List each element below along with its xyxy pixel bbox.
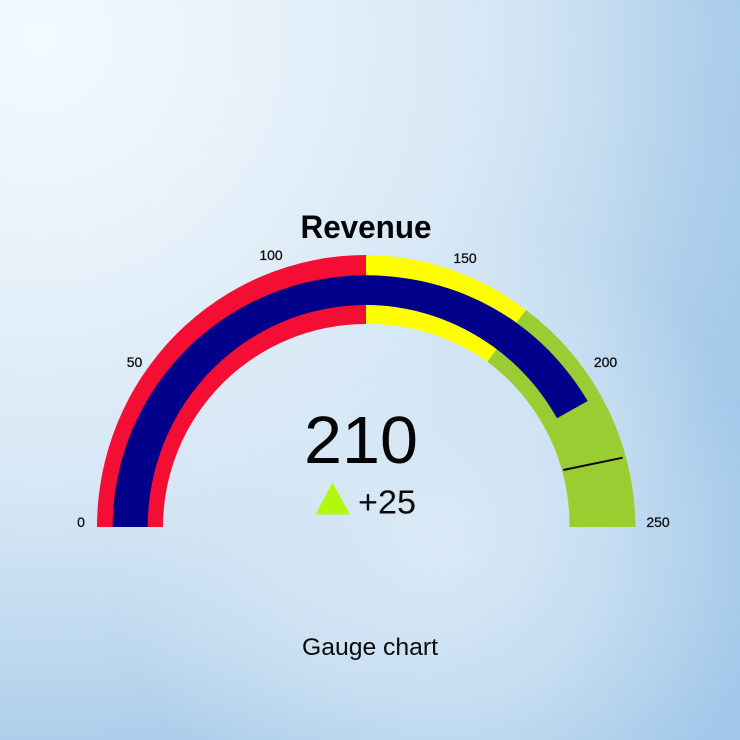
scale labels [77, 247, 670, 530]
gauge band: green range [487, 310, 636, 527]
main value: 210 [304, 403, 418, 478]
icon: up triangle [316, 482, 350, 514]
value bar [113, 275, 588, 527]
title: Revenue [300, 209, 432, 245]
label 50: 50 [127, 354, 142, 370]
gauge band: red range [97, 255, 366, 527]
gauge chart [97, 255, 636, 527]
label 0: 0 [77, 514, 85, 530]
gauge band: yellow range [366, 255, 526, 362]
label 250: 250 [646, 514, 670, 530]
target marker [563, 458, 623, 470]
label 150: 150 [453, 250, 477, 266]
delta value: +25 [358, 484, 416, 520]
label 200: 200 [594, 354, 617, 370]
label 100: 100 [259, 247, 283, 263]
caption: Gauge chart [302, 634, 438, 661]
